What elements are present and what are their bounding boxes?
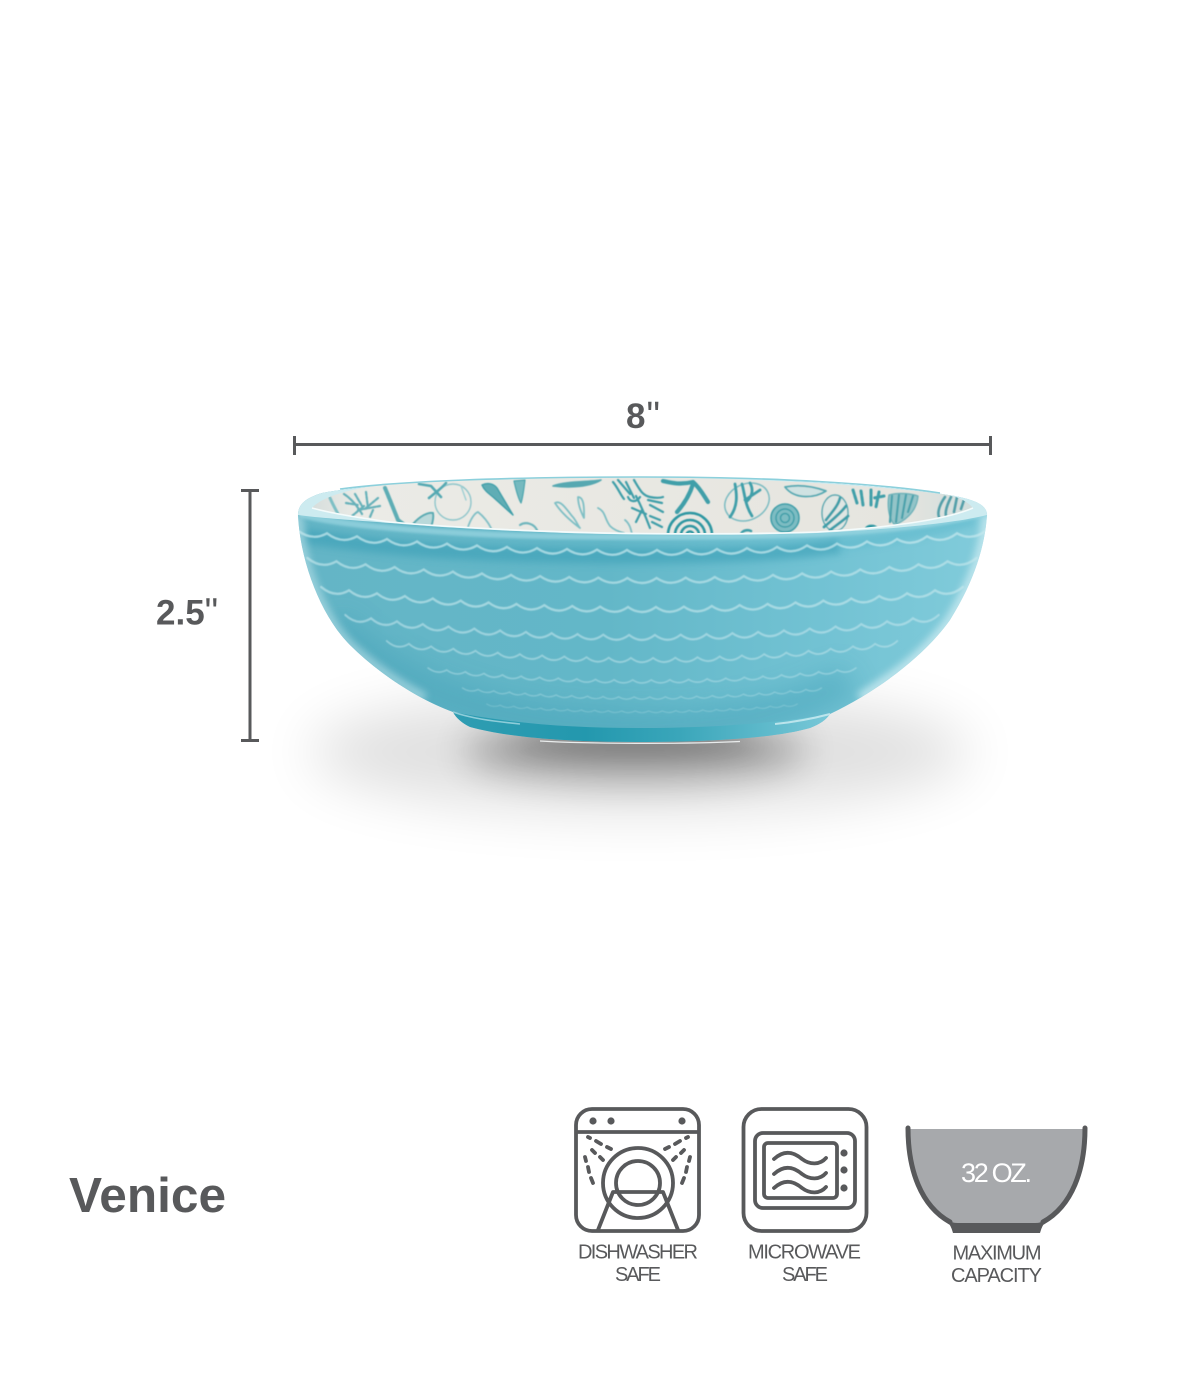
capacity value: 32 OZ. bbox=[961, 1158, 1032, 1188]
bowl rim front edge bbox=[312, 508, 973, 534]
capacity label: MAXIMUM bbox=[952, 1242, 1042, 1264]
height label: 2.5" bbox=[156, 592, 218, 634]
bowl cast shadow bbox=[310, 692, 970, 812]
round spiral shell bbox=[771, 504, 799, 532]
bowl rim top edge bbox=[340, 477, 940, 493]
open shell bbox=[723, 482, 770, 522]
width dimension line bbox=[294, 436, 991, 455]
bowl interior with shell pattern bbox=[312, 478, 972, 533]
starfish bbox=[663, 481, 708, 512]
left leaf and coral sprig bbox=[330, 498, 339, 516]
product name: Venice bbox=[69, 1169, 226, 1223]
icon: dishwasher safe bbox=[576, 1109, 699, 1231]
wave relief rows bbox=[297, 530, 987, 713]
width label: 8" bbox=[626, 395, 660, 437]
dishwasher label bbox=[578, 1242, 698, 1286]
bowl rim lip bbox=[298, 477, 987, 535]
bowl photograph bbox=[290, 470, 995, 750]
icon: maximum capacity bowl bbox=[908, 1128, 1085, 1233]
oval shell bbox=[822, 495, 848, 531]
height dimension line bbox=[241, 490, 259, 741]
antler branch bbox=[555, 497, 632, 534]
right coral bbox=[853, 490, 884, 507]
spiral shell bbox=[666, 510, 714, 533]
far right shell bbox=[938, 497, 964, 517]
cone shell bbox=[482, 484, 513, 515]
dishwasher label: DISHWASHER bbox=[578, 1242, 698, 1264]
flat leaf shell bbox=[553, 480, 601, 487]
large coral bbox=[613, 480, 663, 528]
bowl foot bbox=[453, 712, 830, 742]
microwave label bbox=[748, 1242, 861, 1286]
large scallop shell bbox=[888, 493, 918, 525]
bowl body bbox=[290, 470, 995, 750]
capacity label bbox=[951, 1242, 1042, 1287]
bowl base sliver bbox=[540, 741, 740, 743]
icon: microwave safe bbox=[744, 1109, 866, 1231]
big clam shell bbox=[435, 484, 471, 520]
bowl rim front band bbox=[300, 513, 985, 537]
microwave label: SAFE bbox=[782, 1264, 828, 1286]
microwave label: MICROWAVE bbox=[748, 1242, 861, 1264]
dishwasher label: SAFE bbox=[615, 1264, 661, 1286]
capacity label: CAPACITY bbox=[951, 1265, 1042, 1287]
